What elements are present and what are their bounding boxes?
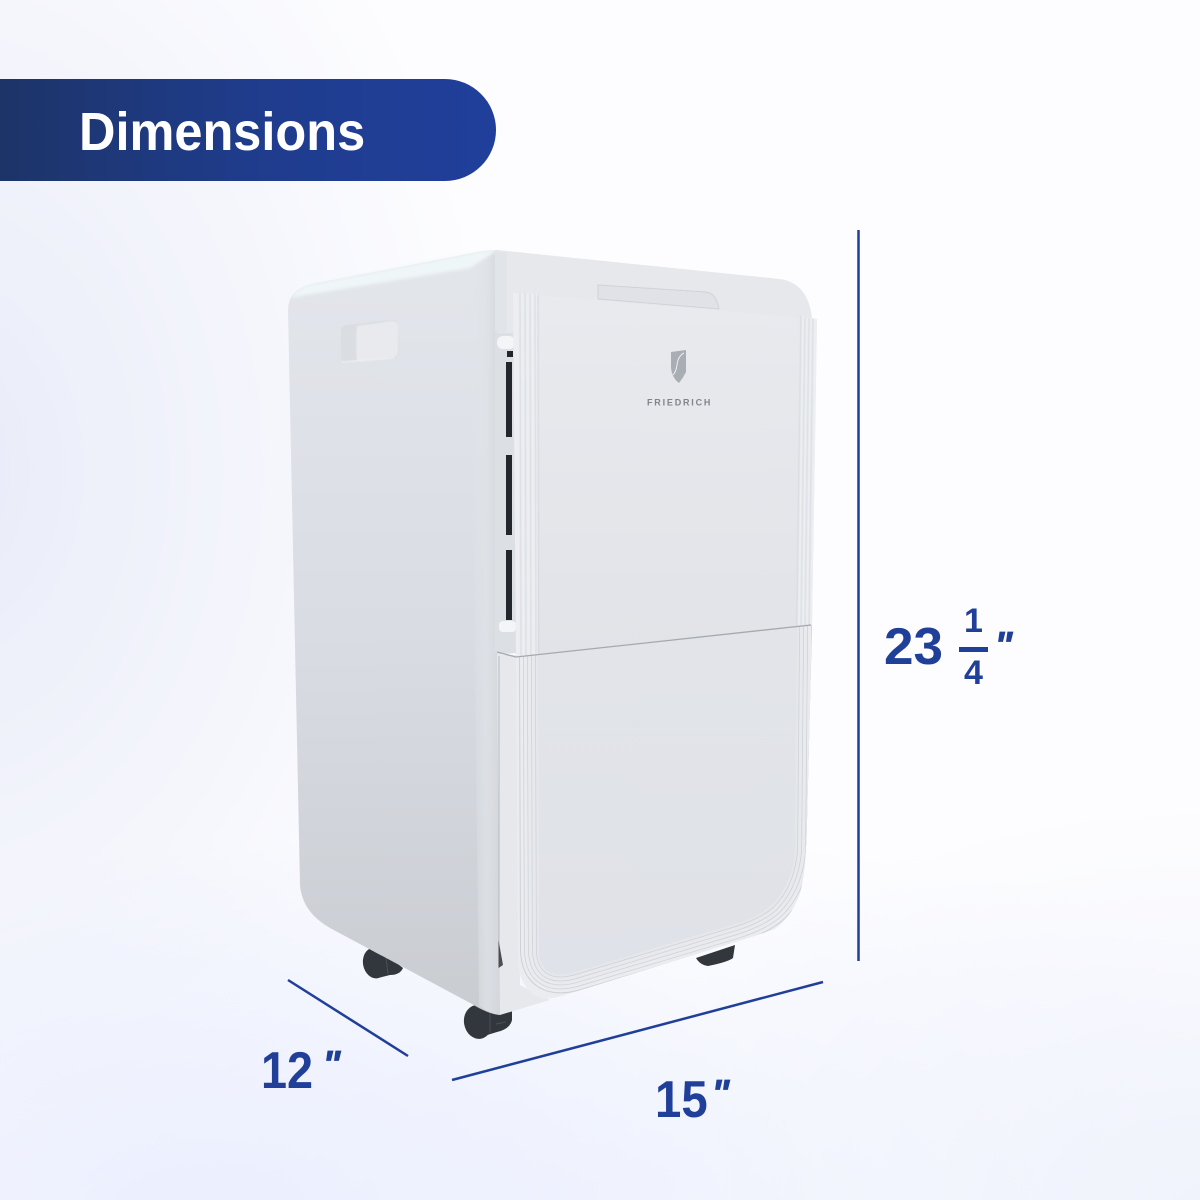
fraction — [959, 602, 988, 692]
width label: 15 — [655, 1071, 708, 1129]
panel seam — [497, 625, 811, 657]
depth label — [261, 1042, 342, 1100]
product illustration: dehumidifier — [288, 250, 817, 1039]
body side panel — [288, 250, 500, 1015]
frame post — [495, 252, 507, 332]
title banner — [0, 79, 496, 181]
icon: Friedrich shield — [671, 350, 686, 383]
icon: right wheel — [696, 945, 735, 966]
upper front panel — [513, 293, 817, 657]
tank ribs — [538, 628, 797, 974]
shield f stroke — [673, 353, 684, 375]
tank face — [538, 628, 797, 974]
top highlight — [291, 251, 496, 298]
width line — [452, 982, 823, 1080]
vent slots — [506, 351, 513, 620]
brand name: FRIEDRICH — [647, 398, 712, 408]
vent pills — [497, 336, 516, 632]
depth label: 12 — [261, 1042, 313, 1100]
heading: Dimensions — [79, 102, 365, 162]
depth label: " — [322, 1044, 341, 1086]
lower strip gap line — [498, 656, 500, 945]
inch mark: " — [994, 625, 1013, 667]
bottom corner shadow gap — [498, 940, 503, 968]
height label — [884, 602, 1014, 692]
icon: front left wheel — [461, 1002, 512, 1041]
side panel corner band — [470, 251, 500, 1015]
fraction: 1 — [964, 602, 983, 640]
width label: " — [712, 1073, 730, 1115]
lower body strip — [497, 655, 550, 1015]
width label — [655, 1071, 730, 1129]
side handle — [341, 320, 399, 362]
fraction: 4 — [964, 654, 983, 692]
body front frame — [497, 250, 812, 655]
height whole number: 23 — [884, 618, 943, 676]
lower water tank panel — [516, 625, 812, 998]
left rib strip — [513, 293, 538, 657]
depth line — [288, 980, 408, 1056]
right rib strip — [797, 316, 817, 627]
height line — [857, 230, 860, 961]
icon: rear left wheel — [360, 946, 403, 980]
panel ribs — [520, 293, 813, 656]
top handle recess — [598, 285, 719, 309]
vent recess — [495, 333, 517, 653]
logo — [647, 350, 712, 408]
